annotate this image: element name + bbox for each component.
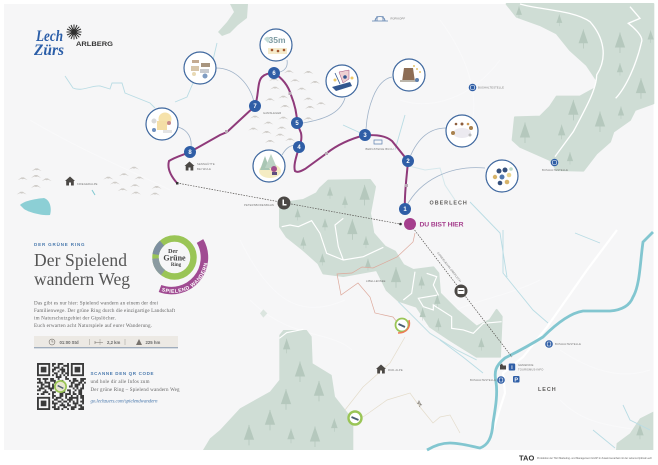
hut: Sennhütte: SENNHÜTTE [197,162,215,166]
hut: Sennhütte [184,162,215,171]
hiker icon [417,401,422,407]
cable car lines [177,183,512,357]
cable car icon: Oberlech [436,251,468,298]
illustration: station 7 [184,52,216,84]
stop numbers: 2 [406,159,410,165]
stop numbers: 4 [297,145,301,151]
info and parking icons: P [514,378,518,384]
mountains: centre group [248,70,326,143]
info and parking icons: i [511,365,513,371]
cable car icon: Petersbodenbahn: PETERSBODENBAHN [244,203,274,207]
title: Der Spielend [34,250,127,270]
title: wandern Weg [34,269,130,289]
bus stops: BUSHALTESTELLE [555,342,581,346]
lake [20,198,51,215]
stats bar: 2,2 km [107,340,121,345]
stop numbers [184,67,414,215]
bus stops: BUSHALTESTELLE [542,168,568,172]
bus stops: BUSHALTESTELLE [478,86,504,90]
stop numbers: 6 [272,71,276,77]
logo: Lech Zürs Arlberg [33,24,113,59]
place label: Lech: LECH [538,387,557,393]
you are here marker: DU BIST HIER [420,222,464,228]
intro text [34,300,176,329]
logo: Lech Zürs Arlberg: Zürs [33,42,64,59]
labels: terrain: BERGSTEIGE BUCH [366,147,394,151]
labels: terrain [263,111,394,283]
bus stops: BUSHALTESTELLE [470,378,496,382]
info and parking icons: TOURISMUS-INFO [518,368,544,372]
stats bar: 01:00 Std [60,340,79,345]
connector lines [178,60,485,207]
illustration: station 3 [393,59,425,91]
QR call to action: SCANNE DEN QR CODE [90,371,154,376]
salmon side trail [337,233,415,322]
forest: bottom left [203,309,353,450]
logo: Lech Zürs Arlberg: Lech [35,28,63,45]
illustration: station 8 [146,108,178,140]
stop numbers: 5 [295,121,299,127]
hut: Rud-Alpe: RUD-ALPE [388,368,403,372]
ring marker: upper [396,318,409,333]
hut: Kriegeralpe [65,176,98,186]
badge: Der Grüne Ring: SPIELEND WANDERN [162,262,208,293]
hut: Sennhütte: BEI WULE [197,167,211,171]
illustration: station 1 [486,160,518,192]
illustration: station 5 [326,65,358,97]
info and parking icons [500,363,544,384]
illustration: station 2 [446,115,478,147]
stats bar [34,336,178,348]
logo: Lech Zürs Arlberg: ARLBERG [76,41,113,48]
stats bar: 225 hm [146,340,160,345]
footer credit: Produktion der TAO Marketing- und Management GmbH in Zusammenarbeit mit der Lebens-Optimal Lech [537,457,653,460]
QR call to action [90,371,180,404]
badge: Der Grüne Ring: Ring [171,263,182,268]
river: Lech [427,232,653,450]
QR call to action: Der grüne Ring – Spielend wandern Weg [90,388,180,393]
stream near trail [405,165,455,200]
beige side trails [345,337,460,433]
forest: central ridge [280,180,502,360]
streams [65,43,650,448]
stop numbers: 1 [403,207,407,213]
illustration: station 4 [253,150,285,182]
QR call to action: go.lechzuers.com/spielendwandern [90,400,158,404]
place label: Oberlech: OBERLECH [430,200,468,206]
intro text: Das gibt es nur hier: Spielend wandern an einem der drei [34,300,159,306]
bridge icon: RÜFIKOPF [390,16,405,20]
info and parking icons: GEMEINDE [518,363,534,367]
clock icon [49,339,55,345]
footer credit [519,454,653,462]
badge: Der Grüne Ring: Der [168,249,178,255]
purple trail [168,73,408,209]
stop numbers: 3 [363,133,367,139]
intro text: Euch erwarten acht Naturspiele auf eurer Wanderung. [34,322,152,329]
footer credit: TAO [519,454,534,462]
forest: top right [507,4,654,171]
bridge icon [372,16,405,21]
labels: terrain: GAMSLEGER [263,111,281,115]
QR call to action: und hole dir alle Infos zum [90,380,150,385]
you are here marker [399,218,464,230]
hut: Rud-Alpe [376,364,403,374]
badge: Der Grüne Ring: Grüne [163,254,186,262]
forest: top centre [218,4,248,36]
cable car icon: Oberlech: GONDELBAHN OBERLECH [436,251,462,283]
intro text: im Naturschutzgebiet der Gipslöcher. [34,316,116,322]
stop numbers: 7 [253,104,257,110]
ring marker: lower [348,412,362,424]
hut: Kriegeralpe: KRIEGERALPE [77,182,98,186]
pond [92,190,95,195]
road [493,230,617,430]
bus stops [469,84,581,384]
illustration: station 6 [260,29,292,61]
illustration: station 6: 35m [268,35,286,45]
labels: terrain: LIBELLENSEE [366,279,386,283]
badge: Der Grüne Ring [152,235,208,294]
logo star [66,24,82,40]
stop numbers: 8 [188,150,192,156]
QR code [37,363,86,410]
title [34,250,130,289]
intro text: Familienwege. Der grüne Ring durch die einzigartige Landschaft [34,307,176,314]
forest: bottom right [616,412,653,450]
mountains: left group [17,167,162,196]
eyebrow heading: DER GRÜNE RING [34,241,85,247]
cable car icon: Petersbodenbahn [244,196,290,210]
